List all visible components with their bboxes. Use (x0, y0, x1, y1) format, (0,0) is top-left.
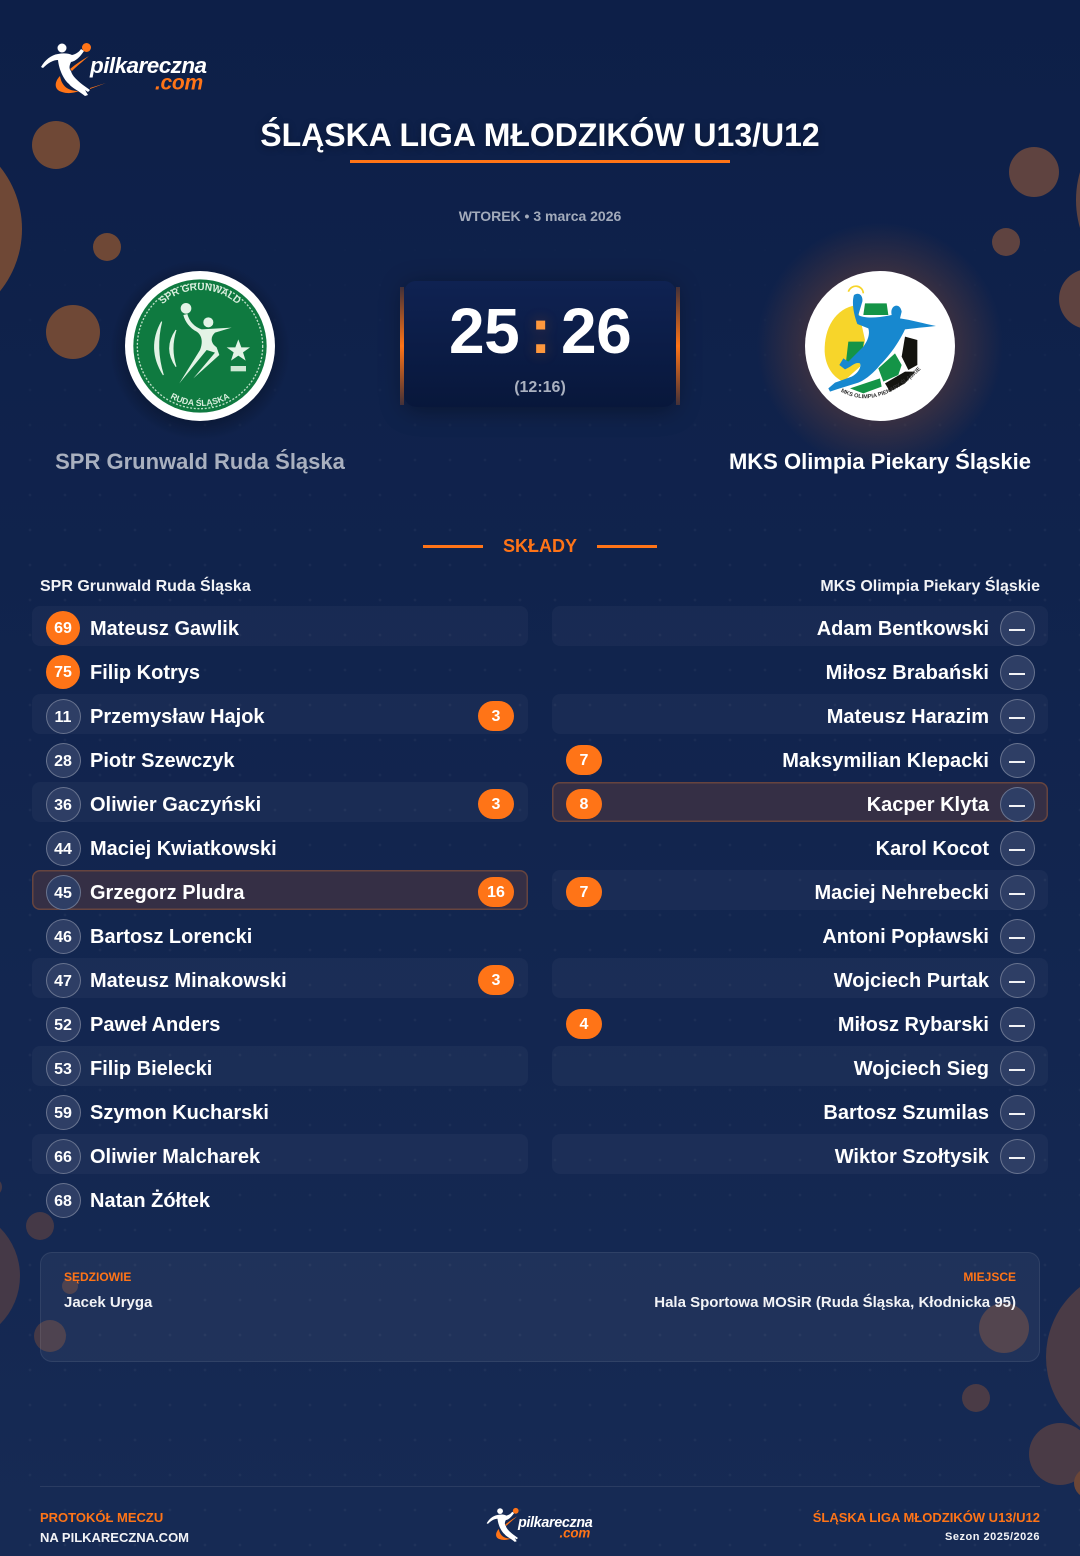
player 52 (46, 1007, 220, 1042)
player 47: Mateusz Minakowski (90, 970, 287, 992)
player 59: 59 (54, 1104, 72, 1122)
player Nehrebecki (552, 870, 1048, 910)
player Harazim (552, 694, 1048, 734)
player 44: 44 (54, 840, 72, 858)
crest: MKS Olimpia: MKS OLIMPIA PIEKARY ŚLĄSKIE (841, 366, 921, 398)
venue label: MIEJSCE (963, 1270, 1016, 1284)
player 11: 3 (492, 708, 500, 725)
player Szołtysik: Wiktor Szołtysik (835, 1146, 989, 1168)
player 59 (46, 1095, 269, 1130)
score away: 26 (561, 295, 631, 367)
player 11: Przemysław Hajok (90, 706, 265, 728)
player Klyta: top scorer: Kacper Klyta (867, 794, 989, 816)
player 11 (32, 694, 528, 734)
player Kocot: Karol Kocot (876, 838, 989, 860)
footer: protocol: PROTOKÓŁ MECZU (40, 1510, 163, 1525)
section heading: składy (423, 536, 657, 556)
score separator: : (530, 295, 551, 367)
player 28: Piotr Szewczyk (90, 750, 235, 772)
footer: league and season: ŚLĄSKA LIGA MŁODZIKÓW U13/U12 (813, 1510, 1040, 1525)
player Szołtysik (552, 1134, 1048, 1174)
player 44: Maciej Kwiatkowski (90, 838, 277, 860)
player Nehrebecki: Maciej Nehrebecki (814, 882, 989, 904)
score panel (398, 279, 682, 417)
player 69 (32, 606, 528, 646)
player Bentkowski: Adam Bentkowski (817, 618, 989, 640)
player 69: 69 (54, 620, 72, 637)
player 68: 68 (54, 1192, 72, 1210)
crest: SPR Grunwald: RUDA ŚLĄSKA (170, 393, 230, 407)
player 46 (46, 919, 252, 954)
footer: league and season (813, 1510, 1040, 1543)
logo: pilkareczna.com (41, 43, 207, 96)
player 75: 75 (54, 664, 72, 681)
panel: match info (40, 1252, 1040, 1362)
player 36 (32, 782, 528, 822)
player 52: 52 (54, 1016, 72, 1034)
half-time score: (12:16) (514, 379, 566, 396)
player 68: Natan Żółtek (90, 1190, 210, 1212)
footer logo (486, 1508, 593, 1542)
player 28 (46, 743, 235, 778)
player Klyta: top scorer (552, 782, 1048, 822)
player Brabański: Miłosz Brabański (826, 662, 989, 684)
player 75 (46, 655, 200, 689)
player 45: top scorer (32, 870, 528, 910)
team name: home: SPR Grunwald Ruda Śląska (55, 449, 345, 474)
crest: MKS Olimpia (767, 233, 993, 459)
player Rybarski: Miłosz Rybarski (838, 1014, 989, 1036)
player 69: Mateusz Gawlik (90, 618, 239, 640)
player 75: Filip Kotrys (90, 662, 200, 684)
player 53: Filip Bielecki (90, 1058, 212, 1080)
player Rybarski: 4 (580, 1016, 588, 1033)
player 36: 3 (492, 796, 500, 813)
section heading: składy: SKŁADY (503, 536, 577, 556)
player 11: 11 (55, 708, 71, 726)
player 28: 28 (54, 752, 72, 770)
lineup header: home: SPR Grunwald Ruda Śląska (40, 578, 251, 595)
player 53: 53 (54, 1060, 72, 1078)
player 66: Oliwier Malcharek (90, 1146, 260, 1168)
referees label: SĘDZIOWIE (64, 1270, 131, 1284)
venue name: Hala Sportowa MOSiR (Ruda Śląska, Kłodnicka 95) (654, 1294, 1016, 1311)
player 46: Bartosz Lorencki (90, 926, 252, 948)
player 53 (32, 1046, 528, 1086)
player 47: 3 (492, 972, 500, 989)
team name: away: MKS Olimpia Piekary Śląskie (729, 449, 1031, 474)
footer logo: pilkareczna (517, 1515, 593, 1531)
player 68 (46, 1183, 210, 1218)
player Klepacki: 7 (580, 752, 588, 769)
player 66: 66 (54, 1148, 72, 1166)
player 47: 47 (54, 972, 72, 990)
player 44 (46, 831, 277, 866)
logo: pilkareczna.com: .com (155, 72, 203, 94)
footer: protocol: NA PILKARECZNA.COM (40, 1530, 189, 1545)
player Sieg (552, 1046, 1048, 1086)
player 59: Szymon Kucharski (90, 1102, 269, 1124)
player 45: top scorer: 16 (487, 884, 505, 901)
player Popławski: Antoni Popławski (822, 926, 989, 948)
player Klepacki (566, 743, 1035, 778)
footer logo: .com (560, 1526, 590, 1541)
lineup header: away: MKS Olimpia Piekary Śląskie (820, 578, 1040, 595)
player 52: Paweł Anders (90, 1014, 220, 1036)
crest: SPR Grunwald (118, 269, 281, 432)
player 36: 36 (54, 796, 72, 814)
title: ŚLĄSKA LIGA MŁODZIKÓW U13/U12 (260, 117, 820, 153)
player Purtak: Wojciech Purtak (834, 970, 989, 992)
player 66 (32, 1134, 528, 1174)
footer: protocol (40, 1510, 189, 1545)
player Harazim: Mateusz Harazim (827, 706, 989, 728)
player 46: 46 (54, 928, 72, 946)
logo: pilkareczna.com: pilkareczna (89, 53, 207, 78)
player Purtak (552, 958, 1048, 998)
player Sieg: Wojciech Sieg (854, 1058, 989, 1080)
referee name: Jacek Uryga (64, 1294, 152, 1311)
player 45: top scorer: 45 (54, 884, 72, 902)
player Klyta: top scorer: 8 (580, 796, 588, 813)
player 36: Oliwier Gaczyński (90, 794, 261, 816)
lineup: away (552, 611, 1048, 1174)
score home: 25 (449, 295, 519, 367)
crest: SPR Grunwald: SPR GRUNWALD (159, 283, 240, 304)
player Klepacki: Maksymilian Klepacki (782, 750, 989, 772)
match date: WTOREK • 3 marca 2026 (459, 208, 621, 224)
footer: league and season: Sezon 2025/2026 (945, 1531, 1040, 1543)
player Bentkowski (552, 606, 1048, 646)
player Rybarski (566, 1007, 1035, 1042)
player 45: top scorer: Grzegorz Pludra (90, 882, 244, 904)
player Szumilas: Bartosz Szumilas (823, 1102, 989, 1124)
title underline (350, 160, 730, 163)
lineup: home (32, 611, 528, 1218)
player 47 (32, 958, 528, 998)
player Nehrebecki: 7 (580, 884, 588, 901)
